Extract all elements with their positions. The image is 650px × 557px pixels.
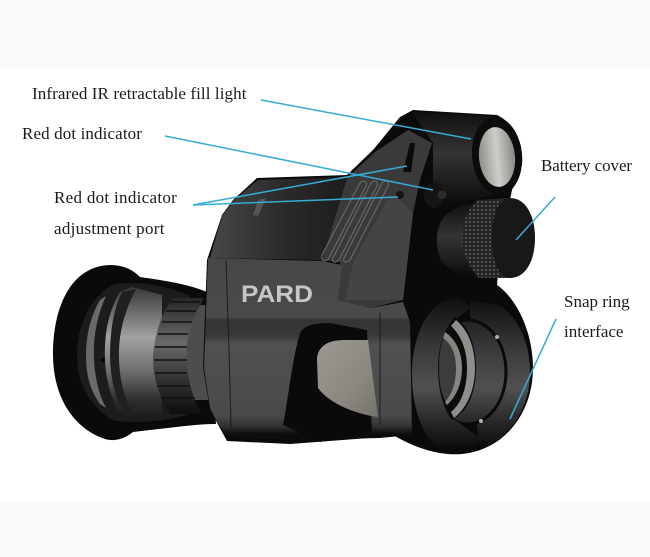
textured grip [317,340,378,417]
body silhouette [203,110,533,454]
logo panel [204,258,412,440]
label: red dot indicator adjustment port [54,188,177,238]
eyepiece barrel behind ring [186,305,208,400]
label: snap ring interface: interface [564,322,623,341]
grip cavity [283,323,372,442]
lens opening [438,317,476,420]
ring screws [495,335,499,339]
ventilation slots [322,181,388,262]
infrared fill light housing [412,112,525,205]
top band [0,0,650,68]
eyepiece focus ring [153,298,204,414]
inner ring band [430,320,506,424]
label: snap ring interface: Snap ring [564,292,630,311]
adjustment port [396,191,404,199]
front ring [412,297,480,453]
pivot screw [424,182,446,208]
label: battery cover: Battery cover [541,156,632,175]
bottom band [0,502,650,557]
label: red dot indicator adjustment port: Red dot indicator [54,188,177,207]
battery cover knob [437,198,535,278]
label: red dot indicator adjustment port: adjustment port [54,219,165,238]
upper shoulder panel [210,177,347,260]
callout lines [165,100,556,419]
label: red dot indicator: Red dot indicator [22,124,142,143]
red dot indicator window [403,143,415,172]
body seam lines [226,260,380,428]
logo: PARD: PARD [241,281,313,308]
label: snap ring interface [564,292,630,341]
label: infrared fill light: Infrared IR retractable fill light [32,84,247,103]
slot panel [322,130,432,308]
front ring assembly [412,297,530,453]
eyepiece [53,265,216,440]
rear ring [470,300,530,449]
main body [203,110,533,454]
